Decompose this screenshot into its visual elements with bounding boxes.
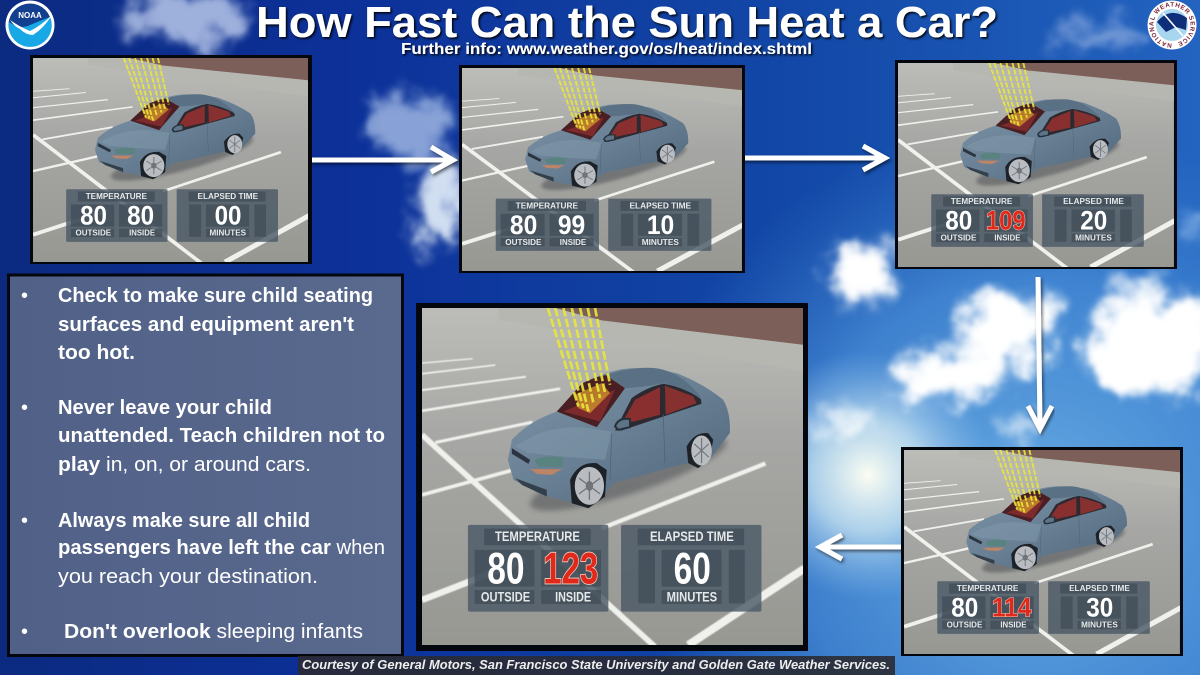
panel: 20 minutes car: TEMPERATURE: [951, 197, 1012, 206]
tip: sleeping infants: Don't overlook sleeping infants: [64, 621, 363, 643]
panel: 60 minutes car: 80: [487, 544, 525, 593]
panel: 20 minutes car: 20: [1080, 206, 1107, 236]
panel: 00 minutes car: ELAPSED TIME: [198, 192, 258, 201]
panel: 30 minutes car: 114: [992, 593, 1032, 623]
arrow: 0 to 10 minutes: [310, 147, 453, 172]
tip: sleeping infants: •: [21, 621, 28, 643]
panel: 00 minutes car: [30, 55, 312, 264]
panel: 10 minutes car: OUTSIDE: [505, 237, 541, 247]
panel: 00 minutes car: MINUTES: [210, 228, 246, 238]
panel: 20 minutes car: [895, 60, 1177, 269]
arrow: 20 to 30 minutes: [1028, 277, 1052, 429]
panel: 10 minutes car: INSIDE: [560, 237, 586, 247]
panel: 10 minutes car: 10: [647, 210, 674, 240]
credit footer: Courtesy of General Motors, San Francisco State University and Golden Gate Weather Services.: [302, 658, 890, 672]
tip: check seating surfaces: Check to make sure child seating: [58, 285, 373, 307]
panel: 00 minutes car: 00: [215, 201, 241, 231]
panel: 60 minutes car: TEMPERATURE: [495, 528, 580, 544]
panel: 20 minutes car: INSIDE: [994, 233, 1020, 243]
panel: 20 minutes car: 80: [945, 206, 972, 236]
tip: check all passengers left: •: [21, 510, 28, 532]
arrow: 30 to 60 minutes: [820, 535, 904, 559]
tip: check seating surfaces: [21, 285, 373, 364]
panel: 10 minutes car: 80: [510, 210, 537, 240]
panel: 00 minutes car: INSIDE: [129, 228, 155, 238]
panel: 00 minutes car: OUTSIDE: [76, 228, 111, 238]
tip: check all passengers left: passengers have left the car when: [58, 537, 385, 559]
tip: check seating surfaces: too hot.: [58, 342, 135, 364]
tip: never leave child unattended: play in, on, or around cars.: [58, 454, 311, 476]
panel: 60 minutes car: 60: [674, 544, 711, 593]
panel: 60 minutes car: MINUTES: [667, 589, 717, 605]
tip: check seating surfaces: surfaces and equipment aren't: [58, 314, 354, 336]
tip: check all passengers left: Always make sure all child: [58, 510, 310, 532]
panel: safety tips: [8, 275, 402, 656]
panel: 20 minutes car: ELAPSED TIME: [1063, 197, 1124, 206]
panel: 20 minutes car: MINUTES: [1075, 233, 1112, 243]
panel: 60 minutes car: OUTSIDE: [481, 589, 530, 605]
tip: never leave child unattended: [21, 397, 385, 476]
subtitle: further info link: Further info: www.weather.gov/os/heat/index.shtml: [401, 41, 812, 58]
icon: National Weather Service logo: NATIONAL WEATHER SERVICE: [1149, 2, 1195, 48]
panel: 20 minutes car: 109: [986, 206, 1026, 236]
icon: NOAA logo: [6, 0, 54, 50]
panel: 60 minutes car: ELAPSED TIME: [650, 528, 734, 544]
panel: 30 minutes car: 30: [1086, 593, 1113, 623]
panel: 00 minutes car: 80: [80, 201, 107, 231]
tip: never leave child unattended: Never leave your child: [58, 397, 272, 419]
panel: 60 minutes car: 123: [543, 544, 598, 593]
panel: 30 minutes car: [901, 447, 1183, 656]
panel: 30 minutes car: 80: [951, 593, 978, 623]
panel: 10 minutes car: [459, 65, 745, 273]
panel: 10 minutes car: TEMPERATURE: [516, 200, 578, 210]
panel: 30 minutes car: TEMPERATURE: [957, 584, 1018, 593]
panel: 00 minutes car: 80: [127, 201, 154, 231]
tip: never leave child unattended: unattended. Teach children not to: [58, 425, 385, 447]
icon: NOAA logo: NOAA: [18, 11, 42, 20]
arrow: 10 to 20 minutes: [742, 146, 885, 170]
panel: 60 minutes car: INSIDE: [555, 589, 591, 605]
panel: 30 minutes car: OUTSIDE: [947, 620, 982, 630]
tip: check seating surfaces: •: [21, 285, 28, 307]
panel: 10 minutes car: MINUTES: [642, 237, 679, 247]
panel: 30 minutes car: MINUTES: [1081, 620, 1118, 630]
panel: 30 minutes car: ELAPSED TIME: [1069, 584, 1130, 593]
panel: 00 minutes car: TEMPERATURE: [86, 192, 147, 201]
panel: 10 minutes car: 99: [558, 210, 585, 240]
tip: check all passengers left: [21, 510, 385, 588]
tip: never leave child unattended: •: [21, 397, 28, 419]
panel: 10 minutes car: ELAPSED TIME: [629, 200, 691, 210]
panel: 30 minutes car: INSIDE: [1000, 620, 1026, 630]
panel: 60 minutes car: [416, 303, 808, 651]
tip: check all passengers left: you reach your destination.: [58, 566, 318, 588]
panel: 20 minutes car: OUTSIDE: [941, 233, 976, 243]
